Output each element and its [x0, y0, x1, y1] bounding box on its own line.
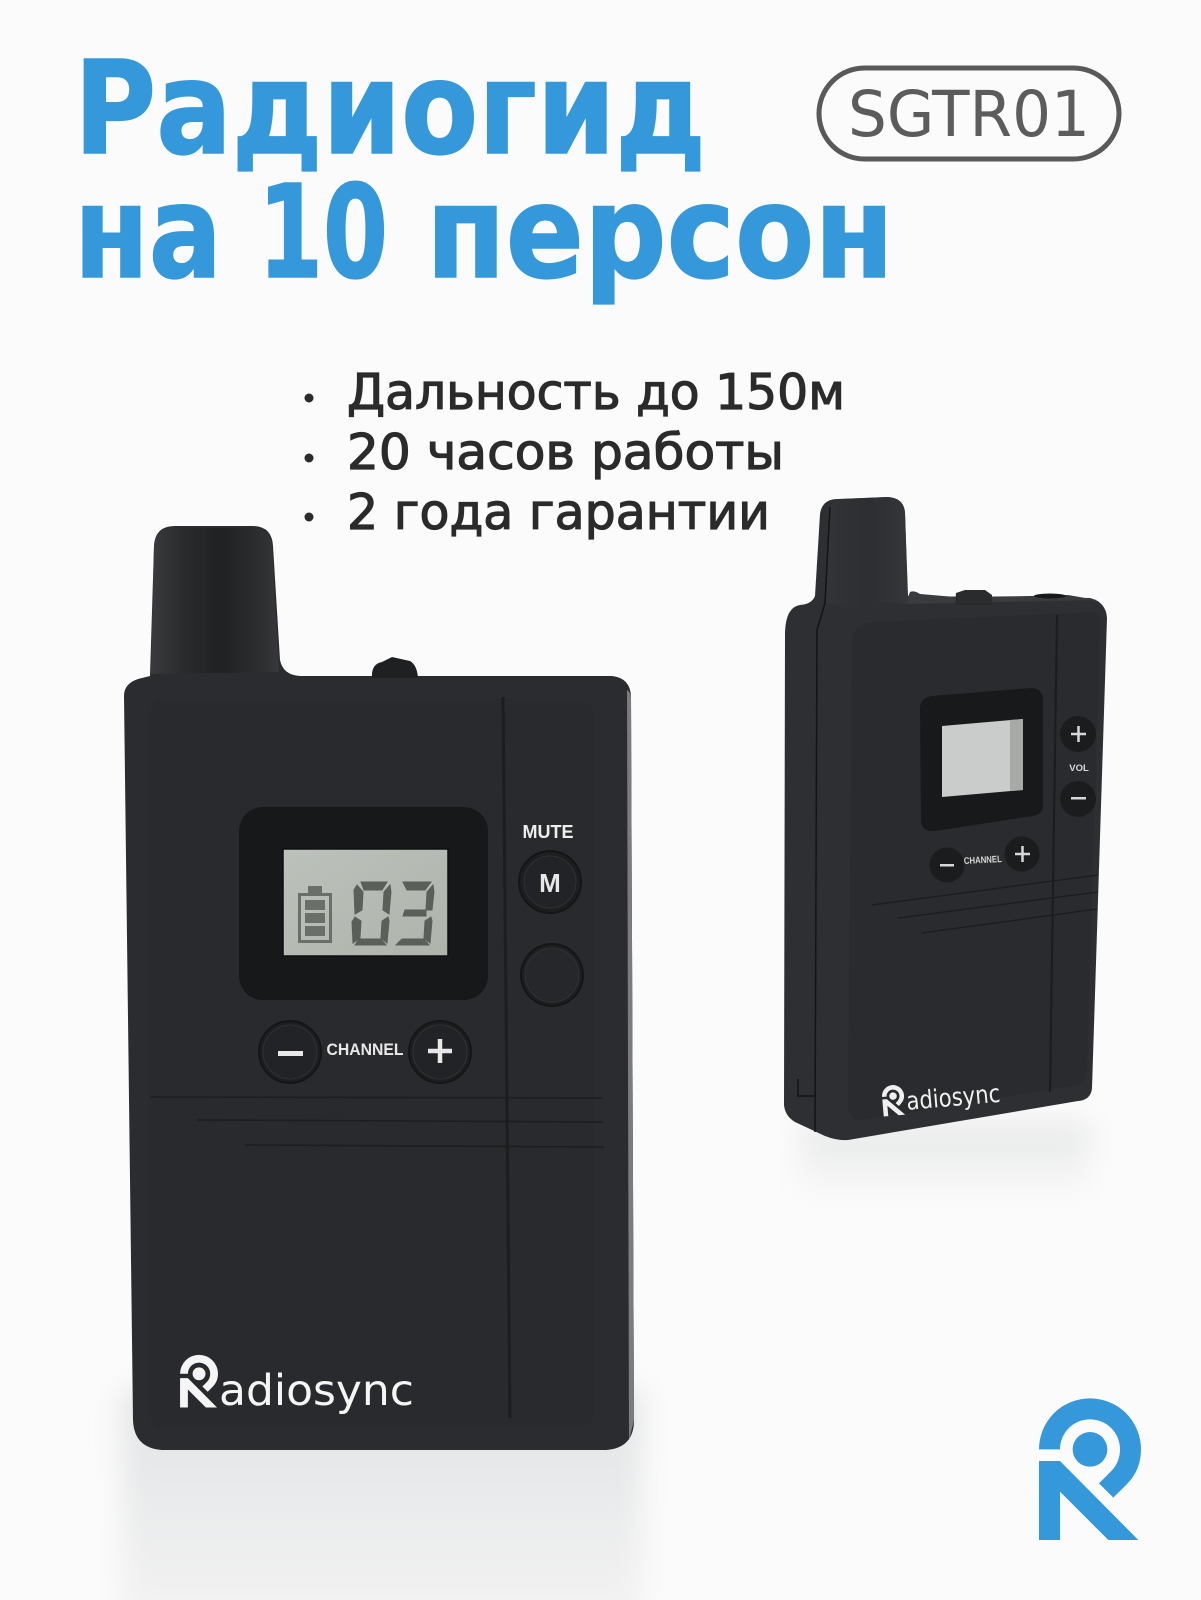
antenna [151, 528, 279, 674]
channel minus button [259, 1021, 321, 1083]
M button [519, 851, 581, 913]
title: на [74, 158, 222, 308]
title: 10 [258, 158, 388, 308]
screen bezel [239, 807, 488, 1000]
battery icon [298, 886, 332, 943]
second device grooves [872, 615, 1098, 1092]
second device body [784, 497, 1107, 1140]
feature list: Дальность до 150м [347, 364, 845, 421]
LCD screen [283, 849, 448, 956]
tuning wheel [372, 657, 418, 678]
channel plus button [1004, 836, 1040, 872]
title: персон [426, 158, 894, 308]
M button: M [539, 868, 561, 898]
brand logo [1039, 1398, 1141, 1540]
channel minus button [930, 848, 964, 882]
seam and latch notch [798, 507, 830, 1132]
Radiosync logo: adiosync [905, 1079, 1001, 1116]
blank button [521, 944, 583, 1006]
model badge: SGTR01 [819, 68, 1119, 159]
volume minus button [1060, 781, 1096, 817]
VOL label: VOL [1069, 763, 1089, 774]
panel grooves [151, 697, 604, 1418]
MUTE label: MUTE [522, 822, 574, 842]
second LCD [942, 719, 1023, 797]
floor shadows [122, 1122, 1090, 1600]
Radiosync logo: adiosync [219, 1366, 414, 1416]
title [74, 34, 894, 308]
main device [124, 526, 634, 1450]
CHANNEL label: CHANNEL [964, 854, 1002, 867]
feature list: 2 года гарантии [347, 484, 770, 541]
channel plus button [409, 1021, 471, 1083]
model badge: SGTR01: SGTR01 [848, 78, 1090, 151]
feature list [304, 364, 845, 541]
front face [848, 612, 1100, 1120]
second device [784, 497, 1107, 1140]
CHANNEL label: CHANNEL [326, 1040, 404, 1059]
right edge highlight [627, 690, 634, 1440]
channel digits 03 [352, 882, 434, 945]
feature list: 20 часов работы [347, 424, 784, 481]
second bezel [920, 688, 1043, 831]
antenna [826, 497, 908, 607]
title: Радиогид [74, 34, 706, 184]
volume plus button [1060, 716, 1096, 752]
device body outline [124, 526, 634, 1450]
top edge, slider wheel and jack [908, 590, 1097, 605]
Radiosync logo [881, 1076, 1001, 1118]
Radiosync logo [180, 1355, 414, 1416]
front panel [148, 699, 594, 1429]
